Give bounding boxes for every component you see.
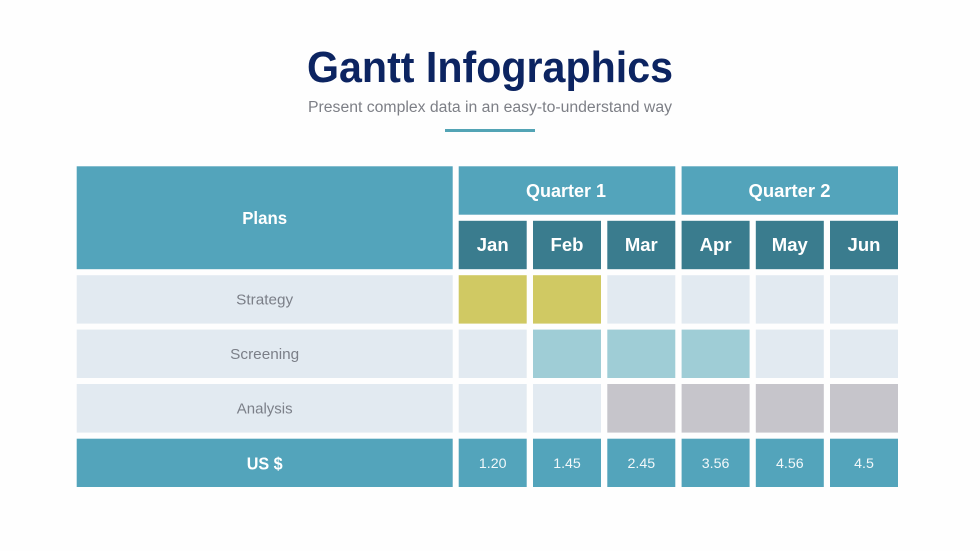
- title: Gantt Infographics: [307, 44, 673, 92]
- row: screening: [77, 330, 898, 378]
- title underline: [445, 129, 535, 132]
- row: US $ totals: 3.56: [702, 456, 730, 472]
- row: US $ totals: 1.45: [553, 456, 581, 472]
- subtitle: Present complex data in an easy-to-understand way: [308, 99, 672, 116]
- row: US $ totals: 4.56: [776, 456, 804, 472]
- header: quarter 2: Quarter 2: [748, 180, 830, 201]
- gantt table: [77, 166, 898, 487]
- month: Jun: Jun: [848, 234, 880, 255]
- month: Jun: [830, 221, 898, 269]
- row: analysis: [77, 384, 898, 433]
- row: screening: Screening: [230, 346, 299, 363]
- header: quarter 1: [459, 166, 675, 215]
- month: Mar: [607, 221, 675, 269]
- row: strategy: Strategy: [236, 292, 294, 308]
- row: analysis: Analysis: [237, 400, 293, 418]
- month: Jan: Jan: [477, 234, 509, 255]
- row: US $ totals: 2.45: [627, 456, 655, 472]
- month: May: [756, 221, 824, 269]
- month: Feb: [533, 221, 601, 269]
- header: quarter 1: Quarter 1: [526, 180, 606, 201]
- row: US $ totals: 4.5: [854, 456, 874, 472]
- month: Apr: [682, 221, 750, 269]
- header: quarter 2: [682, 166, 898, 215]
- month: Mar: Mar: [625, 234, 658, 255]
- row: strategy: [77, 275, 898, 324]
- row: US $ totals: 1.20: [479, 456, 507, 472]
- month: Apr: Apr: [700, 234, 732, 255]
- row: US $ totals: US $: [247, 454, 283, 474]
- header: plans: [77, 166, 453, 269]
- row: US $ totals: [77, 439, 898, 487]
- header: plans: Plans: [242, 208, 287, 228]
- month: Feb: Feb: [551, 234, 583, 255]
- month: May: May: [772, 234, 808, 255]
- month: Jan: [459, 221, 527, 269]
